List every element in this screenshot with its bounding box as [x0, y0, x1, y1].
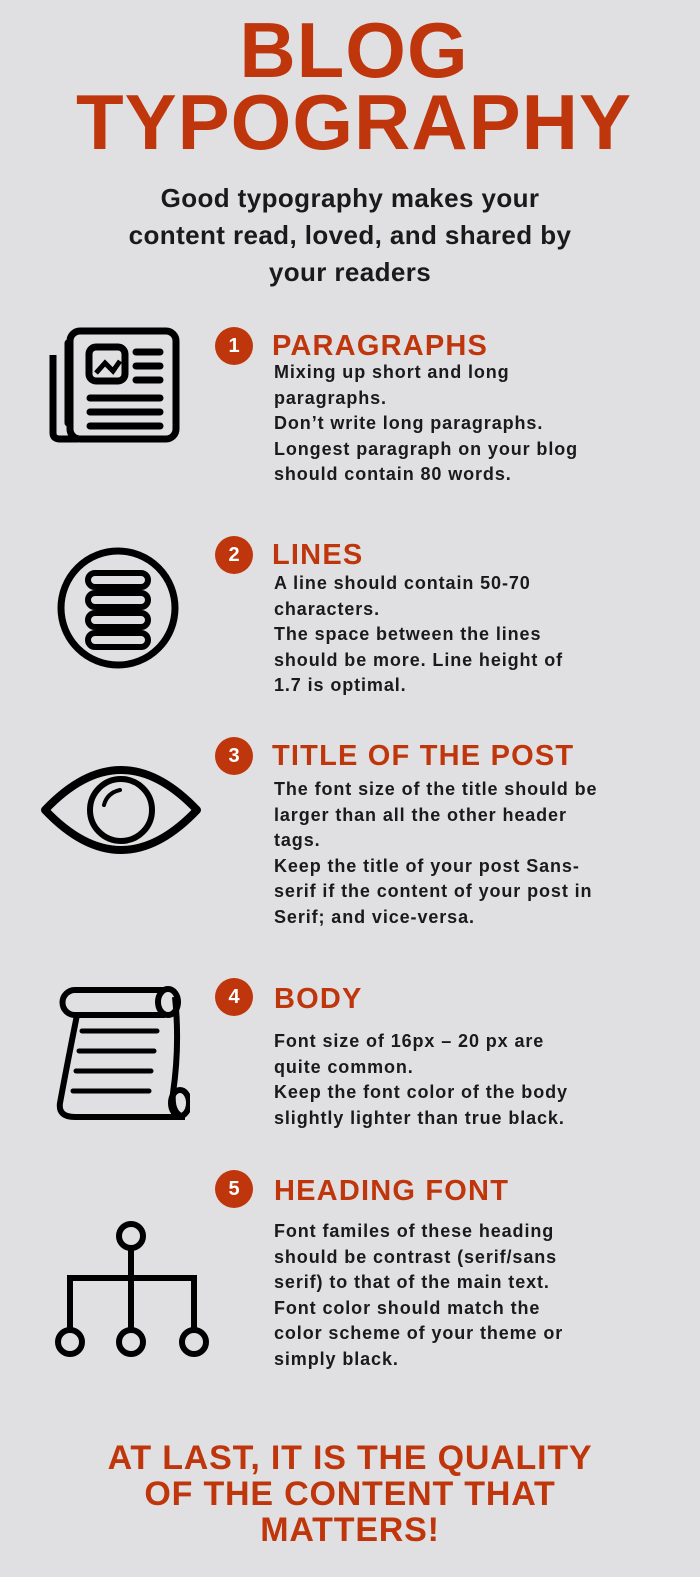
body text: The space between the lines [274, 624, 541, 644]
section 4 [215, 978, 568, 1128]
body text: The font size of the title should be [274, 779, 597, 799]
body text: Keep the title of your post Sans- [274, 856, 580, 876]
section 5 [215, 1170, 563, 1369]
footer callout: AT LAST, IT IS THE QUALITY [108, 1439, 592, 1477]
heading: BODY [274, 983, 363, 1015]
body text: should contain 80 words. [274, 464, 512, 484]
title: BLOG [239, 6, 469, 94]
body text: simply black. [274, 1348, 399, 1368]
body text: quite common. [274, 1056, 414, 1076]
footer callout: MATTERS! [260, 1511, 440, 1549]
section 2 [215, 536, 563, 695]
subtitle: Good typography makes your [161, 183, 539, 213]
title [76, 6, 632, 166]
number badge 1 [215, 327, 253, 365]
heading: HEADING FONT [274, 1175, 509, 1207]
body text: paragraphs. [274, 388, 387, 408]
body text: larger than all the other header [274, 804, 567, 824]
body text: 1.7 is optimal. [274, 675, 407, 695]
title: TYPOGRAPHY [76, 78, 632, 166]
body text: Font familes of these heading [274, 1221, 554, 1241]
number badge 3: 3 [228, 745, 240, 767]
body text: Font size of 16px – 20 px are [274, 1031, 544, 1051]
body text: serif if the content of your post in [274, 881, 592, 901]
subtitle: content read, loved, and shared by [129, 220, 571, 250]
body text: Mixing up short and long [274, 362, 510, 382]
body text: color scheme of your theme or [274, 1323, 563, 1343]
body text: Don’t write long paragraphs. [274, 413, 543, 433]
number badge 3 [215, 737, 253, 775]
body text: characters. [274, 598, 380, 618]
number badge 4 [215, 978, 253, 1016]
icon: lines circle [58, 548, 178, 668]
body text: A line should contain 50-70 [274, 573, 531, 593]
number badge 5 [215, 1170, 253, 1208]
body text: serif) to that of the main text. [274, 1272, 550, 1292]
body text: Serif; and vice-versa. [274, 906, 475, 926]
number badge 1: 1 [228, 335, 240, 357]
subtitle: your readers [269, 257, 431, 287]
body text: should be more. Line height of [274, 650, 563, 670]
subtitle [129, 183, 571, 287]
body text [274, 573, 563, 695]
heading: LINES [272, 539, 363, 571]
icon: scroll [56, 986, 190, 1120]
body text [274, 1031, 568, 1128]
body text: Longest paragraph on your blog [274, 438, 578, 458]
body text: Keep the font color of the body [274, 1082, 568, 1102]
body text: Font color should match the [274, 1298, 540, 1318]
number badge 5: 5 [228, 1178, 240, 1200]
icon: newspaper [50, 328, 180, 442]
body text [274, 779, 597, 926]
body text: slightly lighter than true black. [274, 1108, 565, 1128]
footer callout [108, 1439, 592, 1549]
icon: eye [41, 766, 201, 854]
number badge 4: 4 [228, 986, 240, 1008]
body text: should be contrast (serif/sans [274, 1246, 557, 1266]
section 1 [215, 327, 578, 484]
icon: hierarchy tree [55, 1221, 209, 1357]
heading: TITLE OF THE POST [272, 740, 574, 772]
section 3 [215, 737, 597, 926]
footer callout: OF THE CONTENT THAT [144, 1475, 556, 1513]
body text [274, 362, 578, 484]
body text [274, 1221, 563, 1369]
number badge 2 [215, 536, 253, 574]
heading: PARAGRAPHS [272, 330, 488, 362]
number badge 2: 2 [228, 544, 240, 566]
body text: tags. [274, 830, 321, 850]
